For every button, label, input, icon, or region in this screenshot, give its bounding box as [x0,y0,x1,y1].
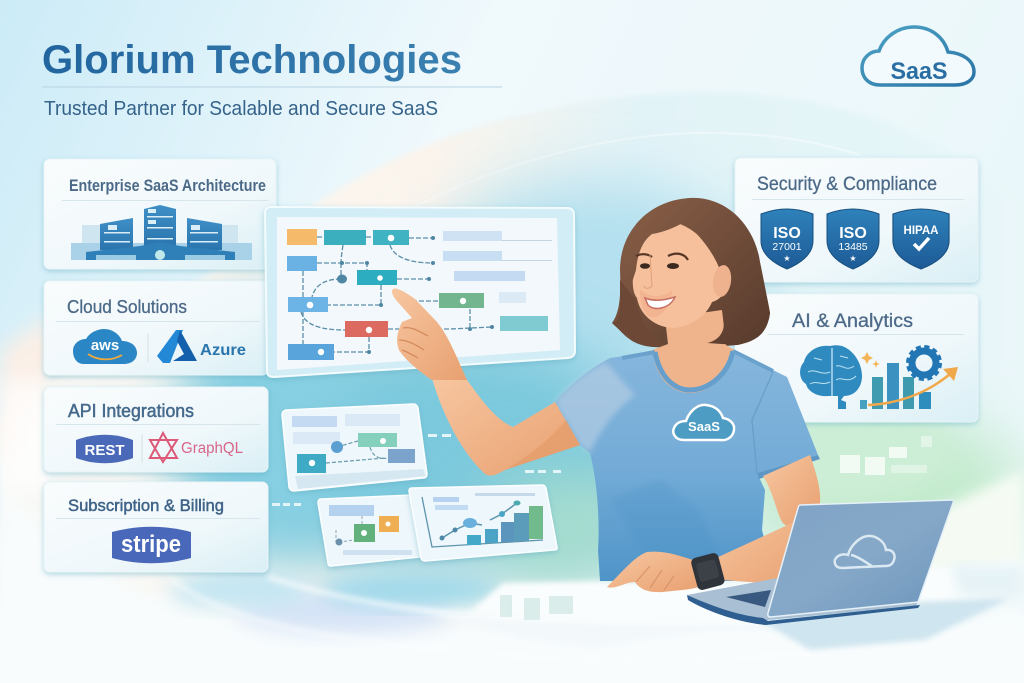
hair back [612,198,770,347]
panel: process diagram board [265,207,575,377]
panel: AI & Analytics [735,294,978,422]
icon: REST badge: REST [84,442,125,459]
badge: HIPAA: HIPAA [904,225,938,237]
panel: small chart card [409,485,557,561]
shirt SaaS logo [673,405,734,440]
icon: GraphQL logo: GraphQL [181,440,243,457]
heading: Subscription & Billing: Subscription & Billing [68,496,224,515]
badge: ISO 13485: ★ [849,254,857,263]
flow nodes [287,229,484,360]
panel: Enterprise SaaS Architecture [44,159,276,269]
right arm [763,455,820,526]
badge: HIPAA [893,209,949,269]
icon: Azure logo: Azure [200,342,246,359]
subtitle: Trusted Partner for Scalable and Secure SaaS [44,97,438,120]
panel: Subscription & Billing [44,482,268,572]
heading: Security & Compliance: Security & Compliance [757,174,937,195]
title: Glorium Technologies [42,38,462,82]
badge: ISO 27001: ★ [783,254,791,263]
icon: aws cloud [73,329,137,364]
logo: SaaS cloud [862,27,974,85]
chart: rising bars [860,363,931,409]
pointing hand [392,288,467,380]
heading: AI & Analytics: AI & Analytics [792,310,913,332]
flow connectors [301,237,492,352]
icon: stripe badge: stripe [121,531,181,558]
icon: aws cloud: aws [91,337,119,354]
text placeholder bars [443,231,552,331]
eyebrows, eyes and smile [636,254,688,308]
panel: Cloud Solutions [44,281,268,375]
person: woman pointing at the board [392,198,820,592]
neck [650,310,738,395]
shirt SaaS logo: SaaS [688,419,720,434]
panel: small flow card [282,404,427,491]
panel: small node card [318,495,420,566]
hair front [622,198,770,345]
badge: ISO 13485: 13485 [838,241,868,253]
icon: brain [800,345,862,409]
heading: Enterprise SaaS Architecture: Enterprise SaaS Architecture [69,177,266,195]
heading: API Integrations: API Integrations [68,401,194,421]
resting hand [607,552,702,592]
icon: growth arrow and sparkles [861,352,958,405]
badge: ISO 27001 [761,209,813,269]
badge: ISO 27001: ISO [773,225,801,242]
pointing arm [432,378,580,476]
badge: ISO 13485: ISO [839,225,867,242]
badge: ISO 27001: 27001 [772,241,802,253]
icon: data center buildings [71,205,252,260]
heading: Cloud Solutions: Cloud Solutions [67,297,187,317]
panel: Security & Compliance [735,158,978,282]
icon: Azure logo [157,330,246,363]
shirt collar band [655,351,733,390]
laptop [687,500,953,625]
shirt body [555,350,818,581]
logo: SaaS cloud: SaaS [890,58,948,85]
ear [711,264,733,298]
icon: stripe badge [112,527,191,563]
smartwatch [690,552,726,591]
icon: GraphQL logo [150,433,243,462]
icon: cloud on laptop lid [835,536,895,568]
icon: REST badge [76,435,133,463]
panel: API Integrations [44,387,268,472]
badge: ISO 13485 [827,209,879,269]
icon: gear [908,347,940,379]
face [633,224,726,328]
